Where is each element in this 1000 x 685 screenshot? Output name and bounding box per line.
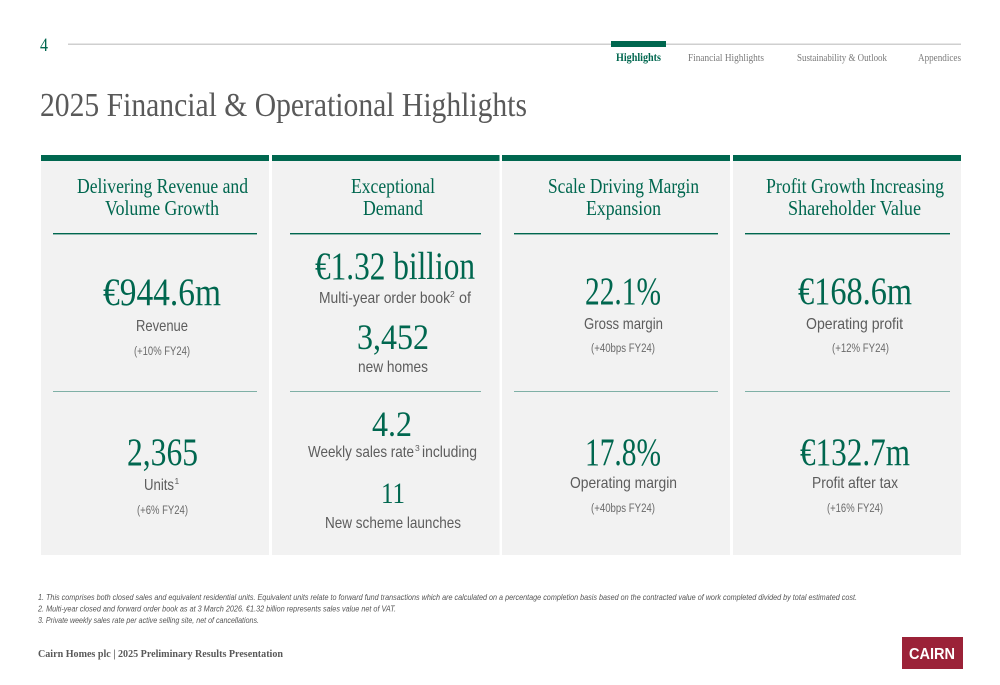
metric: gross margin [584, 270, 663, 355]
heading: Expansion [586, 196, 661, 220]
metric: weekly sales rate [308, 404, 477, 532]
metric: weekly sales rate: Weekly sales rate [308, 444, 414, 461]
metric: operating profit: €168.6m [798, 270, 912, 313]
nav: highlights: Highlights [616, 52, 661, 64]
title: 2025 Financial & Operational Highlights [40, 87, 527, 124]
metric: order book: new homes [358, 359, 428, 376]
heading: Demand [363, 196, 423, 220]
metric: units: (+6% FY24) [137, 505, 188, 517]
metric: order book: Multi-year order book [319, 290, 451, 307]
metric: operating margin: 17.8% [585, 431, 661, 474]
footnotes: 3. Private weekly sales rate per active selling site, net of cancellations. [38, 615, 259, 625]
metric: order book: 2 [450, 289, 455, 299]
metric: profit after tax: €132.7m [800, 431, 910, 474]
heading [766, 174, 944, 220]
metric: weekly sales rate: 11 [381, 477, 405, 510]
metric: revenue [103, 271, 221, 358]
nav: sustainability and outlook: Sustainability & Outlook [797, 52, 887, 64]
metric: units: 2,365 [127, 431, 198, 474]
footnotes: 2. Multi-year closed and forward order book as at 3 March 2026. €1.32 billion represents sales value net of VAT. [37, 604, 396, 614]
metric: operating margin: Operating margin [570, 475, 677, 492]
metric: order book: €1.32 billion [315, 245, 475, 288]
logo: cairn: CAIRN [909, 646, 955, 663]
footnotes [37, 592, 857, 625]
nav: appendices: Appendices [918, 52, 961, 64]
active tab marker [611, 41, 666, 47]
heading: Delivering Revenue and [77, 174, 248, 198]
metric: profit after tax: (+16% FY24) [827, 503, 883, 515]
page number: 4 [40, 35, 48, 56]
navigation bar [68, 41, 961, 64]
metric: gross margin: Gross margin [584, 316, 663, 333]
metric: revenue: (+10% FY24) [134, 346, 190, 358]
nav: financial highlights: Financial Highlights [688, 52, 764, 64]
metric: operating profit [798, 270, 912, 355]
panel: margin expansion [502, 155, 730, 555]
metric: weekly sales rate: 4.2 [372, 404, 412, 444]
logo: cairn [902, 637, 963, 669]
metric: profit after tax: Profit after tax [812, 475, 898, 492]
heading [351, 174, 435, 220]
metric: weekly sales rate: 3 [415, 443, 420, 453]
panel: revenue and volume growth [41, 155, 269, 555]
metric: revenue: Revenue [136, 318, 188, 335]
panel: profit growth [733, 155, 961, 555]
metric: order book: of [459, 290, 471, 307]
metric: operating profit: (+12% FY24) [832, 343, 889, 355]
heading: Volume Growth [105, 196, 219, 220]
metric: operating profit: Operating profit [806, 316, 903, 333]
heading: Scale Driving Margin [548, 174, 699, 198]
metric: revenue: €944.6m [103, 271, 221, 314]
heading: Profit Growth Increasing [766, 174, 944, 198]
heading [548, 174, 699, 220]
footnotes: 1. This comprises both closed sales and equivalent residential units. Equivalent units relate to forward fund transactions which are calculated on a percentage completion basis based on the contracted value of work completed divided by total estimated cost. [38, 592, 857, 602]
metric: operating margin: (+40bps FY24) [591, 503, 655, 515]
metric: order book: 3,452 [357, 317, 429, 357]
metric: gross margin: 22.1% [585, 270, 661, 313]
metric: profit after tax [800, 431, 910, 515]
metric: units: 1 [174, 476, 180, 486]
metric: weekly sales rate: including [422, 444, 477, 461]
metric: order book [315, 245, 475, 376]
metric: units: Units [144, 477, 174, 494]
panel: exceptional demand [272, 155, 500, 555]
heading [77, 174, 248, 220]
metric: weekly sales rate: New scheme launches [325, 515, 461, 532]
footer text: Cairn Homes plc | 2025 Preliminary Results Presentation [38, 648, 283, 660]
heading: Exceptional [351, 174, 435, 198]
heading: Shareholder Value [788, 196, 921, 220]
metric: operating margin [570, 431, 677, 515]
metric: gross margin: (+40bps FY24) [591, 343, 655, 355]
metric: units [127, 431, 198, 517]
